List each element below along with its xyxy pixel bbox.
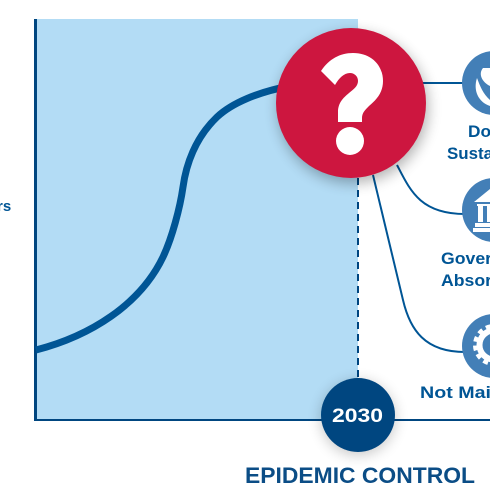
item: government absorption	[441, 178, 490, 290]
label line: Absor: Absor	[441, 272, 490, 290]
label line: Gover: Gover	[441, 250, 490, 268]
x axis	[34, 419, 490, 421]
callout: question mark	[276, 28, 428, 183]
question mark dot	[336, 127, 364, 155]
icon: government building	[462, 178, 490, 242]
y axis	[34, 19, 37, 421]
dashed 2030 marker line	[357, 178, 359, 385]
icon: question mark glyph	[321, 53, 383, 122]
item: not maintained	[420, 314, 490, 402]
year badge: 2030	[321, 378, 395, 455]
label: domestic sustainability	[447, 123, 490, 163]
heading: epidemic control: EPIDEMIC CONTROL	[245, 463, 475, 488]
item: domestic sustainability	[447, 51, 490, 163]
connector lines	[373, 83, 465, 352]
chart panel: light blue area	[36, 19, 358, 420]
label: government absorption	[441, 250, 490, 290]
icon: gear	[462, 314, 490, 378]
growth curve	[36, 86, 290, 350]
label: not maintained: Not Mai	[420, 383, 490, 402]
label line: Do: Do	[468, 123, 490, 141]
icon: globe with hands	[462, 51, 490, 115]
year badge: 2030: 2030	[332, 406, 383, 427]
